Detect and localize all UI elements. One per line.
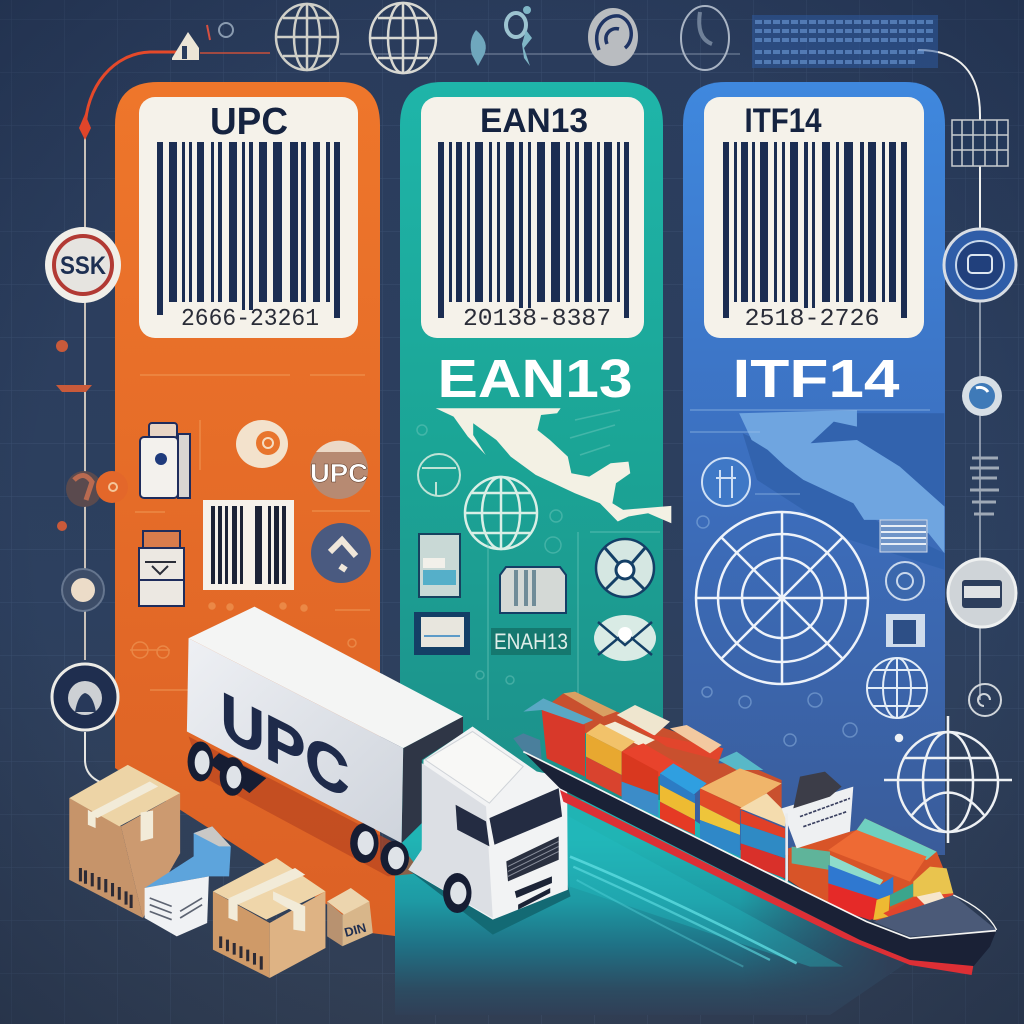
badge: UPC circle: UPC [310, 458, 368, 488]
ITF14 heading: ITF14 [732, 349, 900, 409]
icon: teal card one [419, 534, 460, 597]
icon: spiral circle [236, 420, 288, 468]
icon: small ring [962, 376, 1002, 416]
blue package [145, 826, 231, 936]
EAN13 heading: EAN13 [438, 349, 632, 409]
ITF14 bars [723, 142, 907, 318]
blue doodles [690, 410, 930, 746]
box large left [69, 765, 180, 918]
icon: teal card two [414, 612, 470, 655]
icon: teal barcode tile [500, 567, 566, 613]
icon: oval outline [681, 6, 729, 70]
icon: oval emblem [588, 8, 638, 66]
truck [187, 607, 571, 935]
ITF14 number: 2518-2726 [744, 306, 880, 333]
icon: red pin [79, 114, 91, 140]
icon: blue ring [944, 229, 1016, 301]
ENAH13 tag: ENAH13 [494, 629, 568, 654]
icon: person ring [52, 664, 118, 730]
UPC bars [157, 142, 340, 318]
ship containers [523, 692, 953, 930]
icon: blue badge [886, 562, 924, 600]
icon: teal wheel [596, 539, 654, 597]
box small [327, 888, 373, 946]
icon: ribbon scribble [970, 458, 999, 514]
truck top [189, 607, 463, 748]
box small: DIN [343, 920, 368, 940]
UPC number: 2666-23261 [181, 306, 319, 333]
EAN13 number: 20138-8387 [463, 306, 611, 333]
icon: grey dot [62, 569, 104, 611]
icon: teal globe [465, 477, 537, 549]
panel: orange UPC [115, 82, 395, 936]
ITF14 card label: ITF14 [744, 102, 822, 140]
ship stern block [513, 733, 542, 760]
card: EAN13 barcode [421, 97, 644, 338]
icon: teal circle [418, 454, 460, 496]
icon: box package [139, 531, 184, 606]
map: Mexico [436, 408, 671, 523]
map shadow: dark blue [743, 413, 944, 570]
EAN13 bars [438, 142, 629, 318]
icon: folder ring [948, 559, 1016, 627]
truck cab [408, 727, 568, 920]
teal doodles [417, 410, 660, 720]
icon: blue emblem [702, 458, 750, 506]
panel: blue ITF14 [683, 82, 945, 855]
map: light blue region [739, 410, 944, 553]
icon: jar [140, 423, 190, 498]
left rail icons [45, 114, 128, 782]
truck side with UPC [187, 638, 403, 843]
UPC card label: UPC [210, 101, 288, 143]
icon: house [172, 23, 233, 60]
icon: small barcode [203, 500, 294, 590]
icon: dark circle [311, 523, 371, 583]
water streaks [563, 813, 843, 967]
box center [213, 858, 325, 978]
card: UPC barcode [139, 97, 358, 338]
mid wheels [350, 823, 409, 875]
icon: swirl [969, 684, 1001, 716]
ship hull [523, 752, 997, 975]
icon: globe top 2 [370, 3, 436, 73]
cardboard boxes [69, 765, 373, 978]
icon: red SSK badge [45, 227, 121, 303]
icon: globe top 1 [276, 4, 338, 70]
icon: figures [471, 6, 532, 66]
truck shadow [189, 737, 422, 876]
small red marks [56, 340, 92, 531]
truck side with UPC: UPC [221, 679, 349, 813]
icon: crate [952, 120, 1008, 166]
blue text block top right [752, 15, 938, 68]
rear wheels [188, 742, 266, 796]
connector to boxes [85, 732, 100, 782]
teal floor [395, 800, 910, 1015]
cargo ship [513, 692, 997, 975]
EAN13 card label: EAN13 [480, 102, 588, 140]
chart: radar globe [696, 512, 868, 684]
icon: red SSK badge: SSK [60, 252, 106, 280]
icon: small blue globe [867, 658, 927, 718]
icon: blue square [886, 614, 925, 647]
top row connector lines [85, 50, 980, 700]
panel: teal EAN13 [400, 82, 671, 810]
ship bridge [782, 772, 853, 882]
truck ground shadow teal [408, 870, 571, 935]
icon: large globe with crosshair [884, 716, 1012, 843]
orange doodles [130, 375, 370, 690]
icon: teal envelope [594, 615, 656, 661]
card: ITF14 barcode [704, 97, 924, 338]
right rail icons [884, 120, 1016, 843]
truck end dark [402, 717, 463, 843]
badge: UPC circle [310, 441, 368, 499]
icon: orange dot and knot [66, 471, 128, 507]
icon: striped flag [880, 520, 927, 552]
